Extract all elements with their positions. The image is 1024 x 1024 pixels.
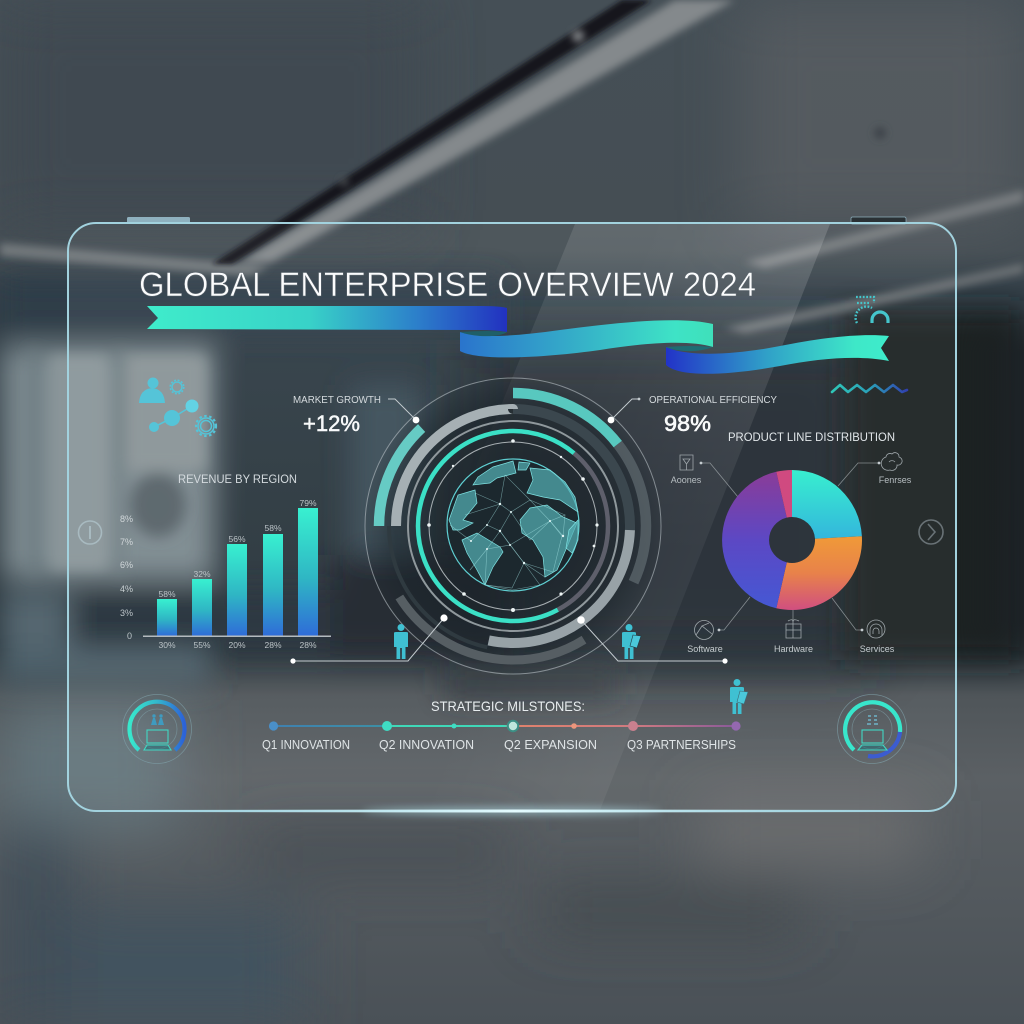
- timeline line: [273, 725, 736, 727]
- timeline heading: STRATEGIC MILSTONES:: [431, 698, 585, 714]
- category labels: 55%: [193, 640, 211, 650]
- bar value labels: [158, 498, 317, 599]
- panel top tab left: [127, 217, 190, 224]
- segment icons and labels: [680, 453, 902, 640]
- milestones timeline: [262, 698, 741, 752]
- connector lines: [701, 463, 879, 630]
- globe: [447, 459, 579, 591]
- callout: operational efficiency: [608, 394, 777, 436]
- glass reflection lower edge: [420, 224, 830, 810]
- icon: dotted arch: [856, 297, 888, 323]
- chart heading: PRODUCT LINE DISTRIBUTION: [728, 430, 895, 444]
- bar value labels: 32%: [193, 569, 211, 579]
- bar value labels: 58%: [264, 523, 282, 533]
- ring arcs: [379, 392, 647, 660]
- right dark wall edge: [1016, 336, 1024, 624]
- outer thin ring: [365, 378, 661, 674]
- y axis labels: 7%: [120, 537, 133, 547]
- bar value labels: 56%: [228, 534, 246, 544]
- icon: people and network: [139, 378, 216, 436]
- timeline labels: Q3 PARTNERSHIPS: [627, 737, 736, 752]
- callout: operational efficiency: 98%: [664, 411, 711, 436]
- category labels: 28%: [299, 640, 317, 650]
- radial globe hub: [365, 378, 661, 674]
- pie chart: product line distribution: Fenrses: [879, 475, 912, 485]
- bars: [157, 508, 318, 636]
- bar value labels: 58%: [158, 589, 176, 599]
- title: GLOBAL ENTERPRISE OVERVIEW 2024: [139, 266, 756, 304]
- y axis labels: 0: [127, 631, 132, 641]
- icon: person: [394, 624, 408, 659]
- pie chart: product line distribution: Services: [860, 644, 895, 654]
- inner ring dots: [427, 439, 599, 612]
- callout: market growth: [293, 394, 419, 436]
- timeline labels: Q1 INNOVATION: [262, 737, 350, 752]
- glass reflection band: [440, 224, 830, 555]
- icon: wave line: [832, 385, 907, 392]
- callout: market growth: MARKET GROWTH: [293, 394, 381, 406]
- category labels: [158, 640, 317, 650]
- gauge right: laptop: [838, 694, 906, 764]
- y axis labels: 3%: [120, 608, 133, 618]
- hub dark backing: [365, 378, 661, 674]
- pie chart: product line distribution: Software: [687, 644, 723, 654]
- timeline nodes: [269, 720, 741, 732]
- callout: market growth: +12%: [303, 411, 360, 436]
- pie chart: product line distribution: Aoones: [671, 475, 702, 485]
- y axis labels: [120, 514, 133, 641]
- y axis labels: 8%: [120, 514, 133, 524]
- donut segments: [792, 470, 862, 539]
- category labels: 30%: [158, 640, 176, 650]
- icon: person with clipboard: [622, 624, 641, 659]
- connector: bottom left: [290, 614, 448, 664]
- glass pane: [68, 223, 956, 811]
- category labels: 20%: [228, 640, 246, 650]
- timeline labels: Q2 EXPANSION: [504, 737, 597, 752]
- pie chart: product line distribution: [671, 430, 912, 654]
- nav button right: [919, 520, 943, 544]
- callout: operational efficiency: OPERATIONAL EFFICIENCY: [649, 394, 777, 406]
- timeline labels: Q2 INNOVATION: [379, 737, 474, 752]
- icon: person with clipboard above milestones: [730, 679, 748, 714]
- timeline labels: [262, 737, 736, 752]
- ribbon banner: [147, 306, 889, 374]
- nav button left: [78, 521, 102, 544]
- panel top tab right: [851, 217, 906, 224]
- pie chart: product line distribution: Hardware: [774, 644, 813, 654]
- chart heading: REVENUE BY REGION: [178, 472, 297, 486]
- bar value labels: 79%: [299, 498, 317, 508]
- connector: bottom right: [577, 616, 728, 664]
- gauge left: laptop: [122, 694, 192, 764]
- category labels: 28%: [264, 640, 282, 650]
- y axis labels: 6%: [120, 560, 133, 570]
- bar chart: revenue by region: [120, 472, 331, 650]
- y axis labels: 4%: [120, 584, 133, 594]
- axis line: [143, 636, 331, 637]
- panel: glass dashboard: [68, 217, 956, 815]
- bottom edge glow: [120, 807, 910, 815]
